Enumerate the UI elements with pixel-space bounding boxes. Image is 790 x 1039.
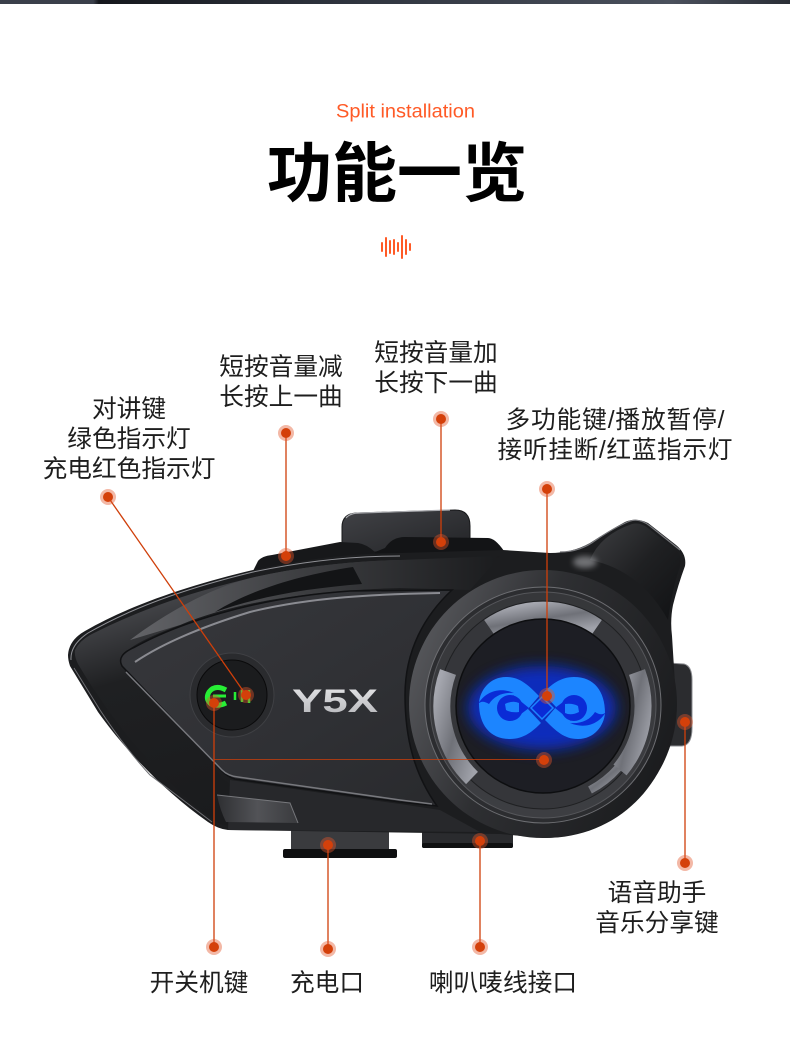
label: multifunction key: 接听挂断/红蓝指示灯 [498,436,732,464]
logo: infinity mark [478,677,606,739]
label: voice assistant: 音乐分享键 [595,909,719,937]
leader lines [108,419,685,949]
label: multifunction key [498,406,732,464]
body shell [68,520,685,838]
device: intercom headset [43,339,732,997]
right side button [668,663,692,746]
callout dots [100,411,693,957]
top slit [215,567,362,612]
label: talk key [43,395,215,483]
fin highlight [590,524,681,620]
centre diamond [531,697,553,719]
panel top highlight line [135,593,440,662]
label: voice assistant: 语音助手 [608,879,706,907]
label: voice assistant [595,879,719,937]
left lobe [478,677,541,739]
right lobe [543,677,606,739]
lower wedge [217,795,298,823]
label: speaker port: 喇叭唛线接口 [429,969,577,997]
bevel outline highlights [71,556,400,660]
panel bottom highlight line [126,672,432,804]
title: 功能一览 [267,137,527,210]
label: power key: 开关机键 [150,969,248,997]
icon: green power glyph [207,687,249,705]
left bevel [75,560,400,826]
bottom port left [283,828,397,858]
bottom port right [422,830,513,848]
lower band [228,780,480,832]
logo glow [468,666,616,750]
front panel [121,590,452,806]
label: talk key: 绿色指示灯 [67,425,191,453]
power button [190,653,274,737]
label: talk key: 充电红色指示灯 [43,455,215,483]
top button left [253,542,375,571]
main dial [409,570,677,838]
glowing disc [456,619,630,793]
label: multifunction key: 多功能键/播放暂停/ [506,406,725,434]
label: talk key: 对讲键 [92,395,166,423]
top button middle [375,537,504,560]
label: volume down [219,353,343,411]
dial silver facets [442,610,643,790]
label: volume up: 短按音量加 [374,339,498,367]
label: charging port: 充电口 [290,969,364,997]
top clip [342,510,470,552]
model label Y5X: Y5X [292,683,379,719]
label: volume up: 长按下一曲 [374,369,498,397]
icon: sound wave [382,236,410,258]
highlight near fin [573,556,597,568]
label: volume down: 短按音量减 [219,353,343,381]
label: volume up [374,339,498,397]
top dark band [130,556,500,640]
label: volume down: 长按上一曲 [219,383,343,411]
top strip [0,0,790,4]
subtitle: Split installation [336,100,475,122]
